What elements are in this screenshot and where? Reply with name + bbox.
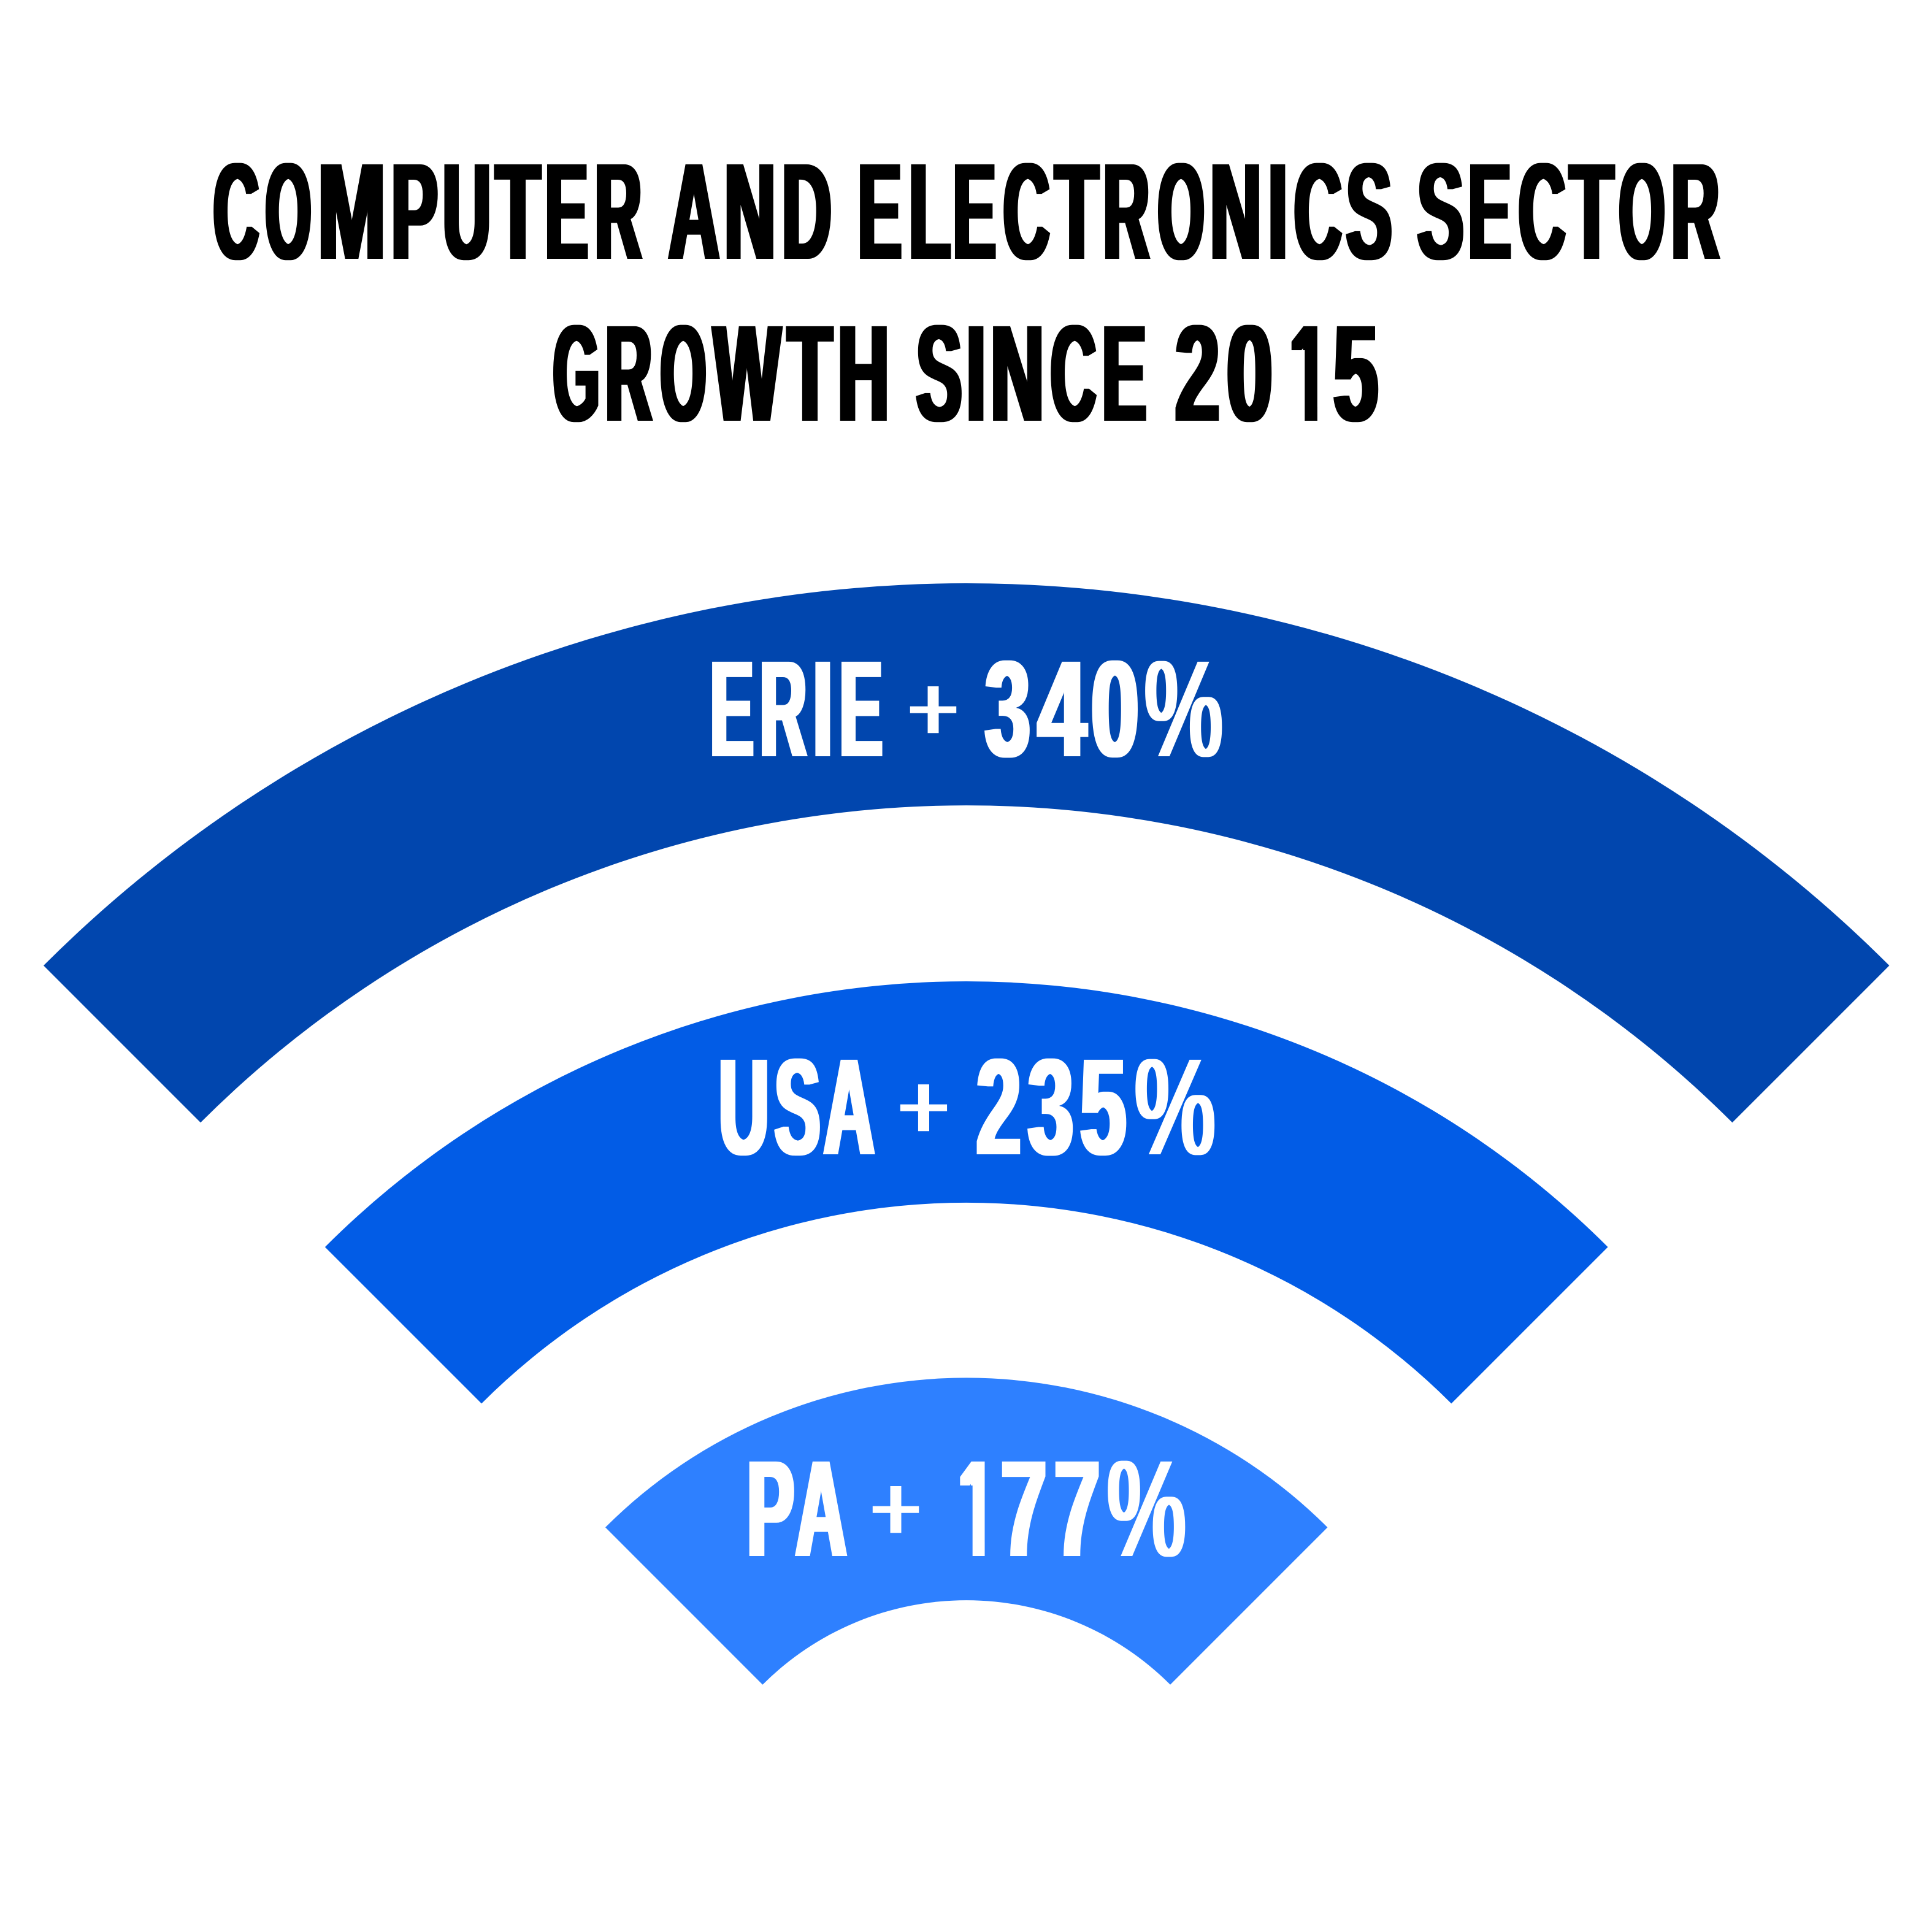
label: Erie + 340%: E: [839, 632, 882, 786]
title line 1: R: [1671, 135, 1719, 288]
title line 2: C: [1051, 297, 1096, 450]
label: PA + 177%: 7: [1001, 1432, 1047, 1585]
label: PA + 177%: [747, 1432, 1186, 1585]
title line 1: O: [266, 135, 311, 288]
title line 1: D: [781, 135, 831, 288]
label: USA + 235%: 3: [1028, 1030, 1073, 1184]
label: USA + 235%: 5: [1080, 1030, 1127, 1184]
label: Erie + 340%: %: [1144, 632, 1222, 786]
title line 2: 0: [1227, 297, 1272, 450]
label: Erie + 340%: E: [710, 632, 753, 786]
title line 2: 1: [1289, 297, 1328, 450]
title line 1: E: [545, 135, 588, 288]
label: Erie + 340%: R: [760, 632, 807, 786]
title line 1: R: [595, 135, 642, 288]
title line 2: E: [1102, 297, 1146, 450]
title line 1: C: [1294, 135, 1341, 288]
title line 1: E: [953, 135, 996, 288]
label: USA + 235%: 2: [976, 1030, 1021, 1184]
label: Erie + 340%: +: [908, 656, 958, 762]
label: USA + 235%: S: [775, 1030, 820, 1184]
title line 1: M: [318, 135, 386, 288]
label: Erie + 340%: I: [813, 632, 832, 786]
title line 2: R: [605, 297, 652, 450]
title line 2: N: [991, 297, 1044, 450]
title line 1: S: [1417, 135, 1463, 288]
label: PA + 177%: 7: [1054, 1432, 1100, 1585]
label: PA + 177%: 1: [958, 1432, 995, 1585]
label: USA + 235%: U: [719, 1030, 769, 1184]
title line 2: H: [838, 297, 889, 450]
title line 1: A: [669, 135, 719, 288]
title line 2: S: [916, 297, 962, 450]
title line 1: E: [1468, 135, 1511, 288]
title line 1: T: [1055, 135, 1098, 288]
label: PA + 177%: A: [795, 1432, 846, 1585]
title line 1: C: [1519, 135, 1565, 288]
label: PA + 177%: %: [1107, 1432, 1186, 1585]
label: Erie + 340%: 4: [1038, 632, 1086, 786]
title line 1: [213, 135, 1720, 288]
label: PA + 177%: P: [747, 1432, 794, 1585]
title line 2: O: [661, 297, 706, 450]
title line 2: W: [713, 297, 780, 450]
title line 1: N: [1210, 135, 1262, 288]
arc: USA: [325, 981, 1608, 1403]
title line 1: P: [391, 135, 438, 288]
label: Erie + 340%: 0: [1091, 632, 1138, 786]
label: USA + 235%: %: [1135, 1030, 1215, 1184]
label: USA + 235%: A: [823, 1030, 874, 1184]
title line 1: C: [213, 135, 259, 288]
label: PA + 177%: +: [871, 1455, 921, 1562]
title line 1: L: [909, 135, 950, 288]
title line 2: T: [788, 297, 832, 450]
title line 2: I: [967, 297, 985, 450]
label: USA + 235%: [719, 1030, 1215, 1184]
label: Erie + 340%: 3: [985, 632, 1030, 786]
title line 1: E: [858, 135, 902, 288]
label: USA + 235%: +: [899, 1054, 949, 1160]
title line 2: 2: [1175, 297, 1219, 450]
title line 1: O: [1619, 135, 1665, 288]
arc: Erie: [44, 583, 1889, 1122]
title line 2: 5: [1333, 297, 1378, 450]
title line 2: G: [553, 297, 599, 450]
title line 1: C: [1003, 135, 1049, 288]
title line 1: O: [1158, 135, 1204, 288]
title line 1: R: [1103, 135, 1149, 288]
arc: PA: [605, 1378, 1327, 1685]
title line 1: U: [443, 135, 491, 288]
title line 1: I: [1268, 135, 1287, 288]
title line 1: S: [1346, 135, 1392, 288]
title line 2: [553, 297, 1379, 450]
title line 1: T: [496, 135, 540, 288]
label: Erie + 340%: [710, 632, 1222, 786]
title line 1: N: [724, 135, 776, 288]
title line 1: T: [1570, 135, 1613, 288]
